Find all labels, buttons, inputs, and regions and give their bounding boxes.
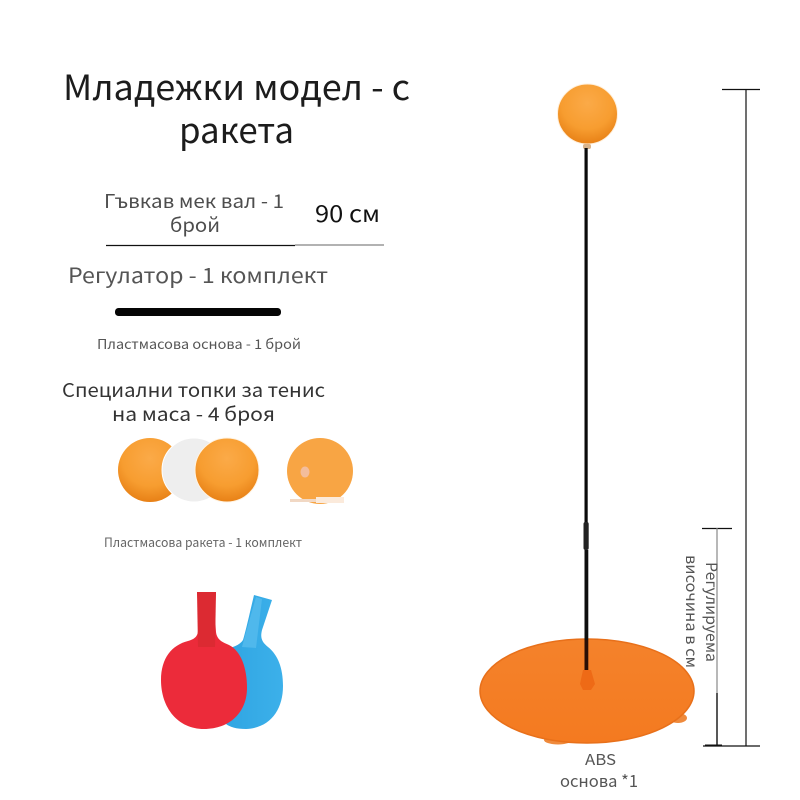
label: adjustable height: Регулируема: [701, 562, 723, 662]
product: orange base: [480, 639, 694, 744]
shaft length line: [106, 244, 384, 246]
label: flexible shaft: брой: [170, 211, 220, 238]
dimension: total height: [703, 89, 760, 746]
title: ракета: [179, 103, 294, 154]
label: 90 cm: 90 см: [315, 195, 380, 229]
icon: blue racket: [222, 595, 283, 729]
icon: four balls: [118, 438, 353, 504]
label: flexible shaft: Гъвкав мек вал - 1: [104, 187, 284, 214]
product: pole: [584, 148, 589, 670]
icon: red racket: [161, 592, 247, 729]
label: special balls: Специални топки за тенис: [62, 376, 325, 403]
title: Младежки модел - с: [63, 60, 410, 111]
label: regulator: Регулатор - 1 комплект: [68, 260, 328, 290]
dimension: adjustable height: [702, 528, 732, 746]
label: adjustable height: [681, 555, 723, 668]
regulator bar: [115, 308, 281, 316]
label: plastic base: Пластмасова основа - 1 брой: [97, 333, 301, 353]
label: adjustable height: височина в см: [681, 555, 703, 668]
label: flexible shaft: [104, 187, 284, 238]
product: top ball: [558, 84, 618, 149]
title: [63, 60, 410, 154]
label: special balls: на маса - 4 броя: [112, 400, 275, 427]
label: ABS base: ABS: [585, 749, 616, 770]
label: ABS base: [560, 749, 638, 792]
label: special balls: [62, 376, 325, 427]
label: plastic racket: Пластмасова ракета - 1 комплект: [104, 532, 303, 551]
label: ABS base: основа *1: [560, 768, 638, 792]
